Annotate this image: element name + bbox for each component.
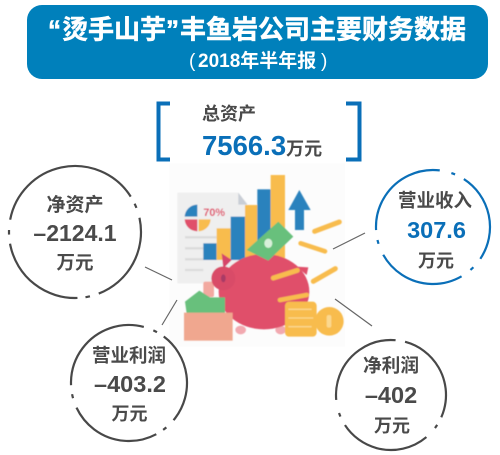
pink accent bbox=[203, 282, 214, 297]
coin stack bbox=[285, 302, 317, 337]
circle: net assets: 净资产 bbox=[46, 194, 104, 216]
right bracket bbox=[346, 104, 360, 160]
circle: operating profit: 万元 bbox=[112, 404, 148, 424]
total assets value: 7566.3万元 bbox=[202, 130, 322, 161]
title text: 烫手山芋 bbox=[62, 14, 166, 44]
title text: ” bbox=[166, 14, 179, 44]
circle: operating profit bbox=[48, 302, 210, 455]
total assets callout bbox=[158, 104, 360, 161]
circle: operating profit: 营业利润 bbox=[92, 345, 166, 366]
document bbox=[177, 193, 247, 283]
title text: 丰鱼岩公司主要财务数据 bbox=[180, 14, 466, 44]
circle: net profit: 万元 bbox=[374, 416, 410, 436]
title banner bbox=[27, 5, 488, 79]
slanted coins bbox=[315, 222, 339, 231]
title text: “ bbox=[48, 14, 61, 44]
central illustration: piggy bank, bars, coins bbox=[169, 163, 345, 347]
green notes in wallet bbox=[185, 291, 225, 313]
circle: operating revenue bbox=[354, 148, 500, 306]
subtitle text: ( bbox=[189, 51, 196, 72]
piggy feet bbox=[235, 326, 246, 334]
circle: operating revenue: 万元 bbox=[418, 251, 454, 271]
total assets label: 总资产 bbox=[202, 104, 256, 124]
up arrow bbox=[288, 190, 311, 230]
circle: operating revenue: 307.6 bbox=[407, 217, 466, 243]
pie chart bbox=[185, 205, 197, 217]
circle: operating revenue: 营业收入 bbox=[398, 190, 472, 211]
circle: net assets bbox=[0, 154, 153, 310]
left bracket bbox=[158, 104, 170, 160]
circle: net profit: –402 bbox=[365, 382, 417, 408]
subtitle text: 2018年半年报 bbox=[198, 49, 316, 72]
circle: net assets: –2124.1 bbox=[33, 220, 117, 246]
green banknote bbox=[247, 222, 293, 261]
connector lines bbox=[145, 233, 372, 326]
red percentage text: 70% bbox=[203, 207, 225, 219]
subtitle text: ) bbox=[321, 51, 327, 72]
circle: net profit bbox=[324, 328, 458, 455]
circle: net profit: 净利润 bbox=[363, 355, 419, 376]
circle: operating profit: –403.2 bbox=[94, 371, 166, 397]
wallet bbox=[184, 313, 233, 341]
piggy body bbox=[219, 254, 309, 329]
circle: net assets: 万元 bbox=[56, 252, 94, 273]
bar chart bbox=[203, 243, 217, 260]
